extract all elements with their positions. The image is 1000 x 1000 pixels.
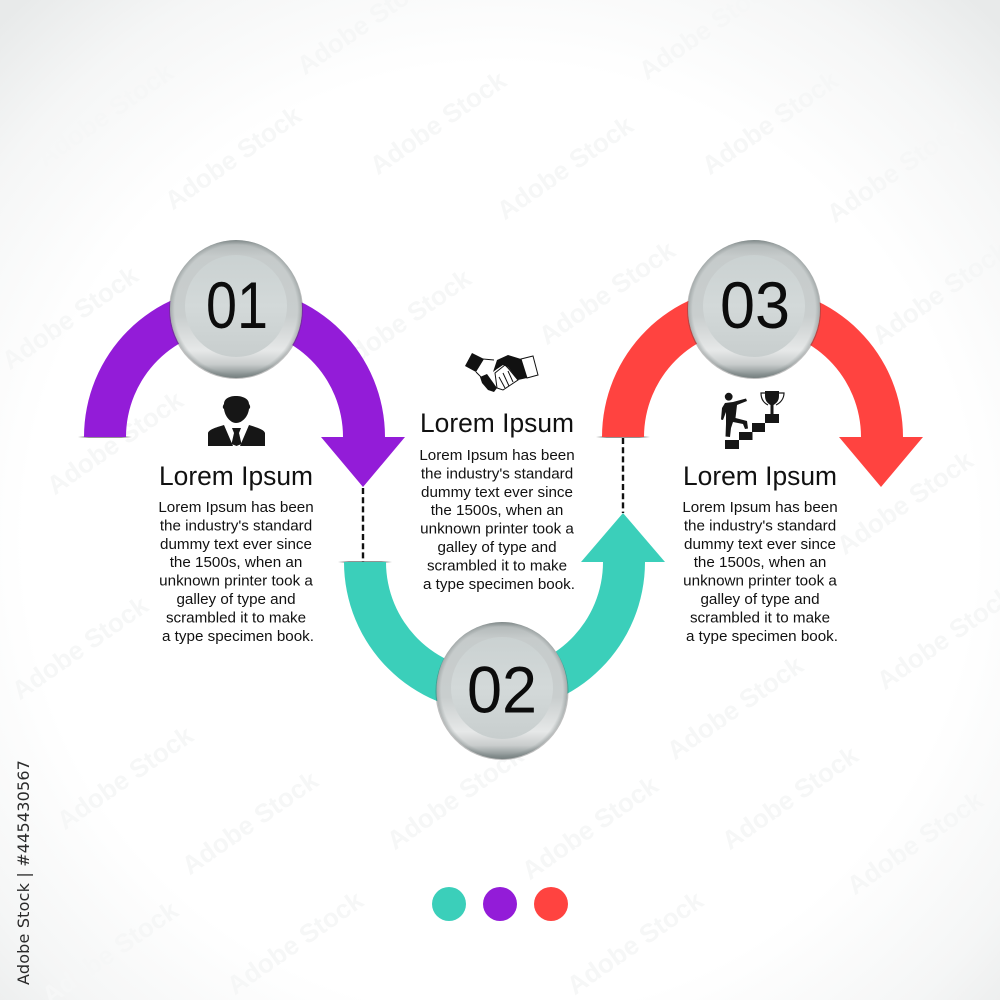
badge 01: 01 bbox=[206, 268, 268, 342]
text block: step 2 bbox=[419, 408, 575, 593]
text block: step 2: dummy text ever since bbox=[421, 484, 573, 501]
text block: step 2: galley of type and bbox=[437, 539, 557, 556]
badge 03: 03 bbox=[720, 268, 790, 342]
text block: step 3 bbox=[682, 461, 838, 645]
icon: businessman bbox=[208, 396, 265, 446]
text block: step 1: dummy text ever since bbox=[160, 536, 312, 553]
text block: step 1: Lorem Ipsum has been bbox=[158, 499, 314, 516]
watermark pattern: Adobe Stock bbox=[661, 649, 809, 765]
badge 03 bbox=[687, 240, 821, 379]
text block: step 2: the 1500s, when an bbox=[431, 502, 563, 519]
dashed connector: purple arrow to teal arc bbox=[362, 488, 364, 562]
watermark pattern: Adobe Stock bbox=[716, 739, 864, 855]
watermark pattern: Adobe Stock bbox=[221, 884, 369, 1000]
text block: step 2: a type specimen book. bbox=[423, 576, 575, 593]
text block: step 1: scrambled it to make bbox=[166, 609, 306, 626]
watermark pattern: Adobe Stock bbox=[41, 384, 189, 500]
stock id label: Adobe Stock | #445430567 bbox=[14, 760, 33, 985]
watermark pattern: Adobe Stock bbox=[533, 234, 681, 350]
text block: step 3: scrambled it to make bbox=[690, 609, 830, 626]
watermark pattern: Adobe Stock bbox=[516, 769, 664, 885]
watermark pattern: Adobe Stock bbox=[51, 719, 199, 835]
text block: step 2: unknown printer took a bbox=[420, 521, 574, 538]
arrow: purple arc bbox=[84, 286, 405, 487]
text block: step 1 bbox=[158, 461, 314, 645]
arrow: teal arc bbox=[344, 513, 665, 712]
text block: step 3: Lorem Ipsum has been bbox=[682, 499, 838, 516]
watermark pattern: Adobe Stock bbox=[696, 64, 844, 180]
watermark pattern: Adobe Stock bbox=[176, 764, 324, 880]
icon: climbing stairs to trophy bbox=[721, 391, 784, 449]
badge 02: 02 bbox=[467, 652, 537, 726]
badge 01 bbox=[169, 240, 303, 379]
text block: step 3: unknown printer took a bbox=[683, 573, 837, 590]
text block: step 2: scrambled it to make bbox=[427, 557, 567, 574]
text block: step 3: galley of type and bbox=[700, 591, 820, 608]
arrow: red arc bbox=[602, 286, 923, 487]
text block: step 3: the 1500s, when an bbox=[694, 554, 826, 571]
base shadow lines bbox=[78, 436, 650, 563]
text block: step 3: the industry's standard bbox=[684, 517, 836, 534]
text block: step 1: Lorem Ipsum bbox=[159, 461, 313, 491]
watermark pattern: Adobe Stock bbox=[831, 444, 979, 560]
watermark pattern: Adobe Stock bbox=[329, 262, 477, 378]
text block: step 3: Lorem Ipsum bbox=[683, 461, 837, 491]
icon: handshake bbox=[465, 353, 538, 392]
legend dots bbox=[432, 887, 568, 921]
text block: step 1: the industry's standard bbox=[160, 517, 312, 534]
watermark pattern: Adobe Stock bbox=[0, 259, 144, 375]
watermark pattern: Adobe Stock bbox=[159, 99, 307, 215]
text block: step 1: a type specimen book. bbox=[162, 628, 314, 645]
text block: step 1: galley of type and bbox=[176, 591, 296, 608]
text block: step 2: the industry's standard bbox=[421, 465, 573, 482]
text block: step 3: a type specimen book. bbox=[686, 628, 838, 645]
text block: step 2: Lorem Ipsum bbox=[420, 408, 574, 438]
text block: step 2: Lorem Ipsum has been bbox=[419, 447, 575, 464]
dashed connector: red arc to teal arrow bbox=[622, 438, 624, 513]
badge 02 bbox=[436, 622, 568, 760]
watermark pattern: Adobe Stock bbox=[841, 784, 989, 900]
text block: step 3: dummy text ever since bbox=[684, 536, 836, 553]
watermark pattern: Adobe Stock bbox=[6, 589, 154, 705]
text block: step 1: unknown printer took a bbox=[159, 573, 313, 590]
watermark pattern: Adobe Stock bbox=[821, 112, 969, 228]
watermark pattern: Adobe Stock bbox=[561, 884, 709, 1000]
watermark pattern: Adobe Stock bbox=[491, 109, 639, 225]
watermark pattern: Adobe Stock bbox=[381, 739, 529, 855]
text block: step 1: the 1500s, when an bbox=[170, 554, 302, 571]
watermark pattern: Adobe Stock bbox=[31, 56, 179, 172]
watermark pattern: Adobe Stock bbox=[364, 64, 512, 180]
